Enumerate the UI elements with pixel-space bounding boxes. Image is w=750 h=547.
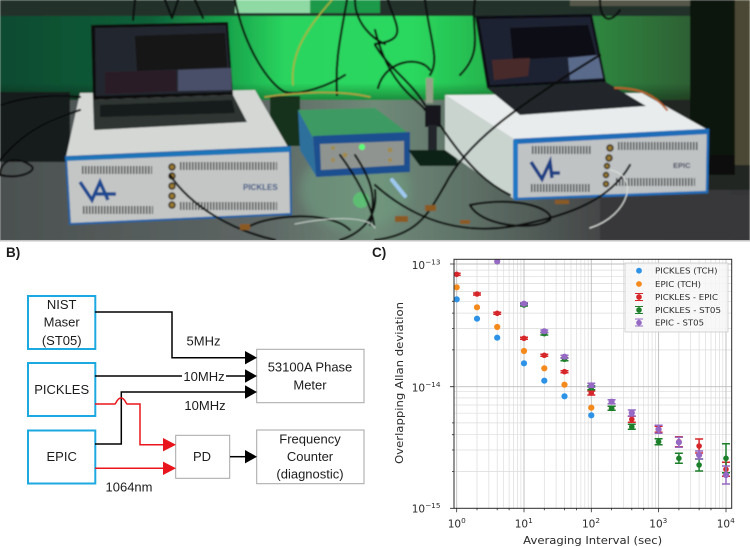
legend: EPIC (TCH) xyxy=(655,280,701,289)
legend: PICKLES (TCH) xyxy=(655,266,718,276)
PICKLES unit xyxy=(66,90,291,224)
x axis tick labels: 10 xyxy=(582,518,595,530)
label: 10MHz EPIC: 10MHz xyxy=(184,398,226,413)
legend: PICKLES - EPIC xyxy=(655,293,718,302)
x axis tick labels: 2 xyxy=(595,516,600,525)
box: PD xyxy=(176,435,230,478)
series: EPIC - ST05 xyxy=(494,258,730,484)
box: NIST Maser: Maser xyxy=(44,315,80,330)
box: frequency counter: (diagnostic) xyxy=(276,467,344,482)
box: frequency counter: Frequency xyxy=(279,431,341,446)
panel: B block diagram xyxy=(6,245,364,495)
x axis tick labels: 0 xyxy=(461,516,466,525)
series: PICKLES - ST05 xyxy=(494,259,730,473)
box: phase meter: 53100A Phase xyxy=(268,360,352,375)
box: EPIC xyxy=(28,430,95,484)
box: NIST Maser: NIST xyxy=(47,297,77,312)
box: PICKLES xyxy=(28,363,95,416)
x axis tick labels: 10 xyxy=(515,518,528,530)
axis ticks xyxy=(450,264,726,512)
box: frequency counter xyxy=(257,430,364,484)
x axis tick labels: 1 xyxy=(528,516,533,525)
laptop right xyxy=(475,14,646,115)
major grid xyxy=(454,259,732,508)
arrow: PICKLES to phase meter xyxy=(95,369,257,383)
y axis tick labels: 10 xyxy=(412,504,425,516)
y axis tick labels: 10 xyxy=(412,260,425,272)
box: NIST Maser xyxy=(28,296,95,349)
legend xyxy=(625,263,728,332)
arrow: PICKLES laser to PD xyxy=(95,398,176,451)
arrow: EPIC to phase meter xyxy=(95,385,257,444)
x axis tick labels: 10 xyxy=(448,518,461,530)
x axis tick labels xyxy=(448,516,735,530)
EPIC unit: EPIC xyxy=(673,161,691,170)
y axis tick labels: 10 xyxy=(412,383,425,395)
minor grid xyxy=(454,259,732,508)
box: EPIC: EPIC xyxy=(47,449,77,464)
heading: B): B) xyxy=(6,245,20,260)
box: NIST Maser: (ST05) xyxy=(42,333,82,348)
box: phase meter xyxy=(257,349,364,403)
arrow: PD to counter xyxy=(230,450,257,463)
legend: PICKLES - ST05 xyxy=(655,306,721,315)
series: PICKLES (TCH) xyxy=(454,296,594,418)
box: phase meter: Meter xyxy=(293,378,327,393)
heading: C): C) xyxy=(372,245,386,260)
series: EPIC (TCH) xyxy=(454,284,594,411)
box: PD: PD xyxy=(193,449,211,464)
plot frame xyxy=(454,259,732,508)
data points xyxy=(453,258,730,484)
central phase meter unit xyxy=(298,108,410,208)
optical post xyxy=(408,78,458,166)
box: PICKLES: PICKLES xyxy=(34,382,89,397)
arrow: EPIC laser to PD xyxy=(95,462,176,475)
legend: EPIC - ST05 xyxy=(655,319,704,328)
label: 1064nm: 1064nm xyxy=(106,480,152,495)
y axis title: Overlapping Allan deviation xyxy=(395,302,406,464)
cables xyxy=(0,0,667,240)
photo: lab setup with two laptops and frequency-reference units xyxy=(0,0,750,241)
y axis tick labels: −14 xyxy=(425,380,441,389)
x axis tick labels: 3 xyxy=(663,516,668,525)
x axis tick labels: 4 xyxy=(730,516,735,525)
x axis title: Averaging Interval (sec) xyxy=(523,536,662,547)
box: frequency counter: Counter xyxy=(287,449,334,464)
y axis tick labels: −15 xyxy=(425,501,440,510)
y axis tick labels xyxy=(412,258,441,516)
x axis tick labels: 10 xyxy=(717,518,730,530)
series: PICKLES - EPIC xyxy=(453,272,730,476)
label: 5MHz: 5MHz xyxy=(187,334,220,348)
laptop left xyxy=(91,22,247,130)
PICKLES unit: PICKLES xyxy=(243,183,278,192)
panel: C Allan deviation chart xyxy=(395,258,735,547)
label: 10MHz PICKLES: 10MHz xyxy=(183,369,225,384)
x axis tick labels: 10 xyxy=(649,518,663,530)
EPIC unit xyxy=(445,93,708,199)
y axis tick labels: −13 xyxy=(425,258,441,266)
arrow: maser to phase meter xyxy=(95,312,257,364)
